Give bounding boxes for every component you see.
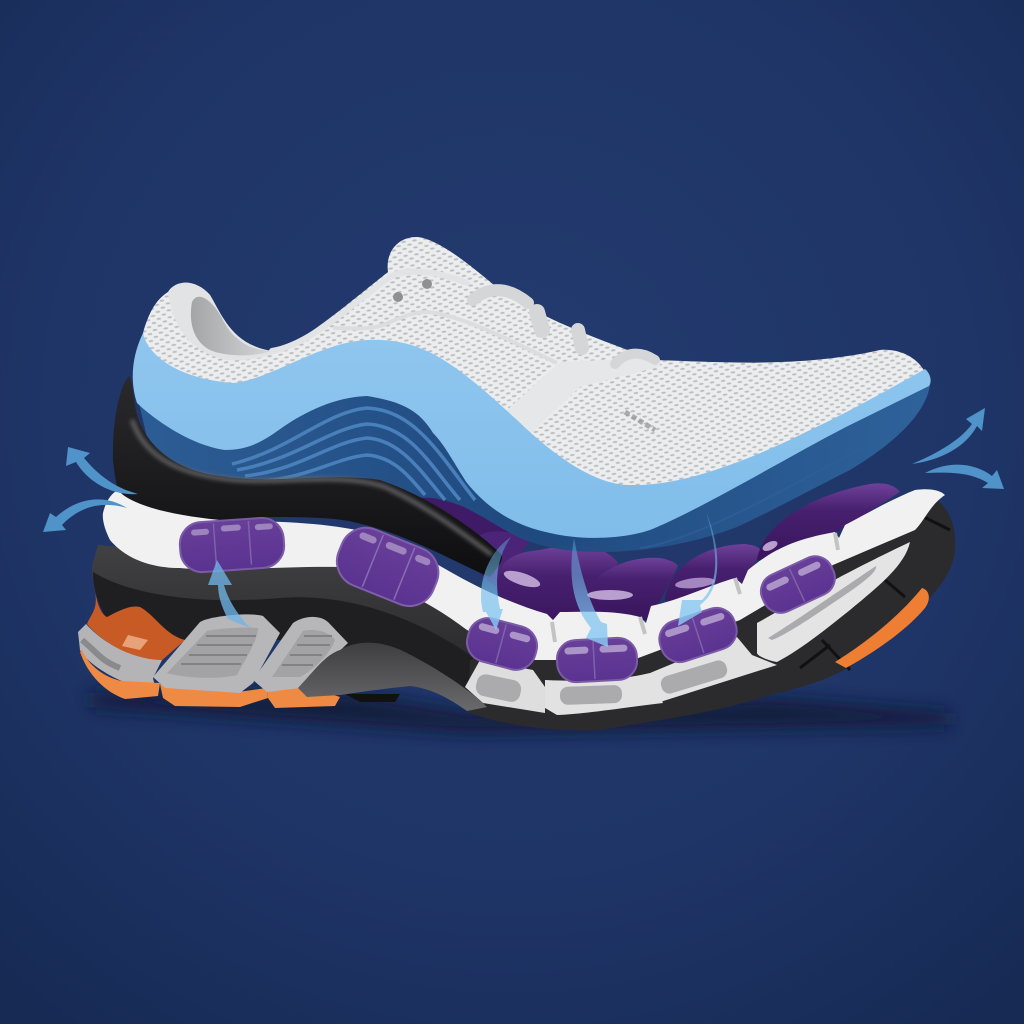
arrow: down into centre capsule xyxy=(571,538,608,647)
orange toe pad xyxy=(835,588,929,668)
dark arch shank xyxy=(298,643,487,711)
black outsole toe xyxy=(468,494,955,730)
black midsole plate xyxy=(113,376,502,577)
midfoot strap xyxy=(507,358,662,437)
dark blue under layer with wave lines xyxy=(137,370,930,552)
toe side panel xyxy=(757,542,910,662)
purple capsule 5 xyxy=(654,603,742,667)
heel gray piece xyxy=(78,624,162,687)
toe scuff xyxy=(625,412,655,430)
eyelets xyxy=(393,292,403,302)
dark foam band xyxy=(92,545,490,692)
arrow: down into forefoot capsule xyxy=(678,512,717,626)
purple capsule 3 xyxy=(462,614,542,674)
back purple air cushions xyxy=(395,483,900,630)
purple capsule 4 xyxy=(556,637,638,683)
ground shadow xyxy=(90,692,950,734)
wave lines xyxy=(232,408,475,500)
arrow: toe upward vent xyxy=(912,408,985,464)
white midsole xyxy=(103,489,945,660)
heel collar pad xyxy=(168,283,273,360)
heel gray pods xyxy=(153,614,348,693)
light blue foam insole xyxy=(133,333,931,538)
heel lining xyxy=(191,297,270,355)
collar trim xyxy=(272,272,467,351)
arrow: down into midfoot capsule xyxy=(481,537,511,630)
heel orange cup xyxy=(87,590,185,662)
purple capsule 2 xyxy=(329,520,446,614)
arrow: heel outward vent xyxy=(43,499,127,532)
heel orange outsole xyxy=(80,650,340,708)
laces xyxy=(473,290,655,364)
lower translucent rim xyxy=(640,425,905,548)
shoe upper xyxy=(143,237,930,501)
forefoot lugs xyxy=(465,637,777,715)
purple capsule 1 xyxy=(178,516,286,574)
arrow: toe outward vent xyxy=(925,465,1004,489)
arrow: heel upward vent xyxy=(66,447,138,494)
arrow: up into heel capsule xyxy=(208,560,250,628)
purple capsule 6 xyxy=(755,550,841,619)
